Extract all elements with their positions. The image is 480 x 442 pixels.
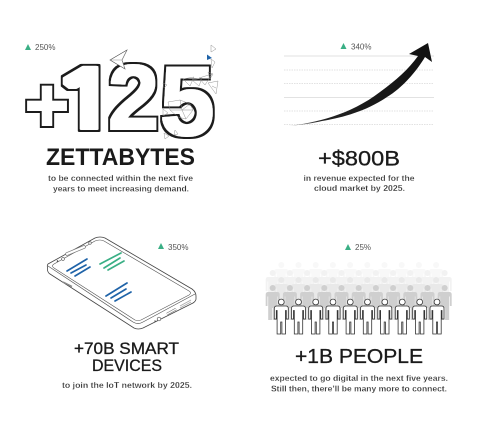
heading: +70B SMART DEVICES: +70B SMART bbox=[74, 340, 179, 358]
heading: +$800B: +$800B bbox=[318, 146, 400, 170]
icon: faded crowd rows bbox=[266, 262, 452, 320]
growth badge: 25%: 25% bbox=[355, 243, 371, 252]
big outlined number +125: + bbox=[25, 63, 69, 147]
big outlined number +125: 1 bbox=[50, 64, 122, 139]
icon: front row of outlined people bbox=[274, 299, 444, 334]
text block: people description: expected to go digital in the next five years. bbox=[270, 374, 448, 383]
growth badge: 340% bbox=[340, 42, 371, 52]
chart bars: blue group, top left bbox=[67, 259, 90, 276]
text block: revenue description bbox=[304, 174, 415, 193]
panel: smart devices bbox=[47, 237, 196, 390]
growth badge: 340%: 340% bbox=[351, 42, 371, 52]
heading: ZETTABYTES: ZETTABYTES bbox=[46, 144, 195, 171]
growth badge: 25% bbox=[345, 243, 371, 252]
text block: devices description: to join the IoT network by 2025. bbox=[62, 381, 192, 390]
panel: people bbox=[266, 243, 452, 394]
growth badge: 350%: 350% bbox=[168, 243, 188, 252]
panel: cloud revenue bbox=[284, 42, 434, 193]
text block: people description: Still then, there’ll be many more to connect. bbox=[271, 384, 447, 394]
big outlined number +125: 5 bbox=[160, 46, 214, 156]
text block: revenue description: in revenue expected for the bbox=[304, 174, 415, 183]
text block: zettabytes description: years to meet increasing demand. bbox=[53, 184, 189, 194]
text block: people description bbox=[270, 374, 448, 394]
text block: zettabytes description: to be connected within the next five bbox=[48, 174, 193, 183]
growth badge: 250%: 250% bbox=[35, 43, 55, 52]
chart bars: green group bbox=[100, 253, 124, 270]
big outlined number +125 bbox=[25, 46, 214, 156]
chart bars: blue group, bottom bbox=[106, 283, 131, 301]
icon: isometric smartphone bbox=[47, 237, 196, 329]
icon: low-poly triangles bbox=[110, 45, 218, 139]
text block: zettabytes description bbox=[48, 174, 193, 194]
heading: +1B PEOPLE: +1B PEOPLE bbox=[295, 346, 423, 368]
chart: grid lines bbox=[284, 56, 434, 124]
panel: zettabytes bbox=[25, 43, 218, 194]
growth badge: 350% bbox=[158, 243, 188, 252]
heading: +70B SMART DEVICES bbox=[74, 340, 179, 375]
text block: revenue description: cloud market by 2025. bbox=[314, 184, 405, 193]
arrow: rising growth curve bbox=[288, 43, 432, 126]
heading: +70B SMART DEVICES: DEVICES bbox=[92, 357, 162, 375]
big outlined number +125: 2 bbox=[108, 47, 159, 149]
growth badge: 250% bbox=[25, 43, 55, 52]
